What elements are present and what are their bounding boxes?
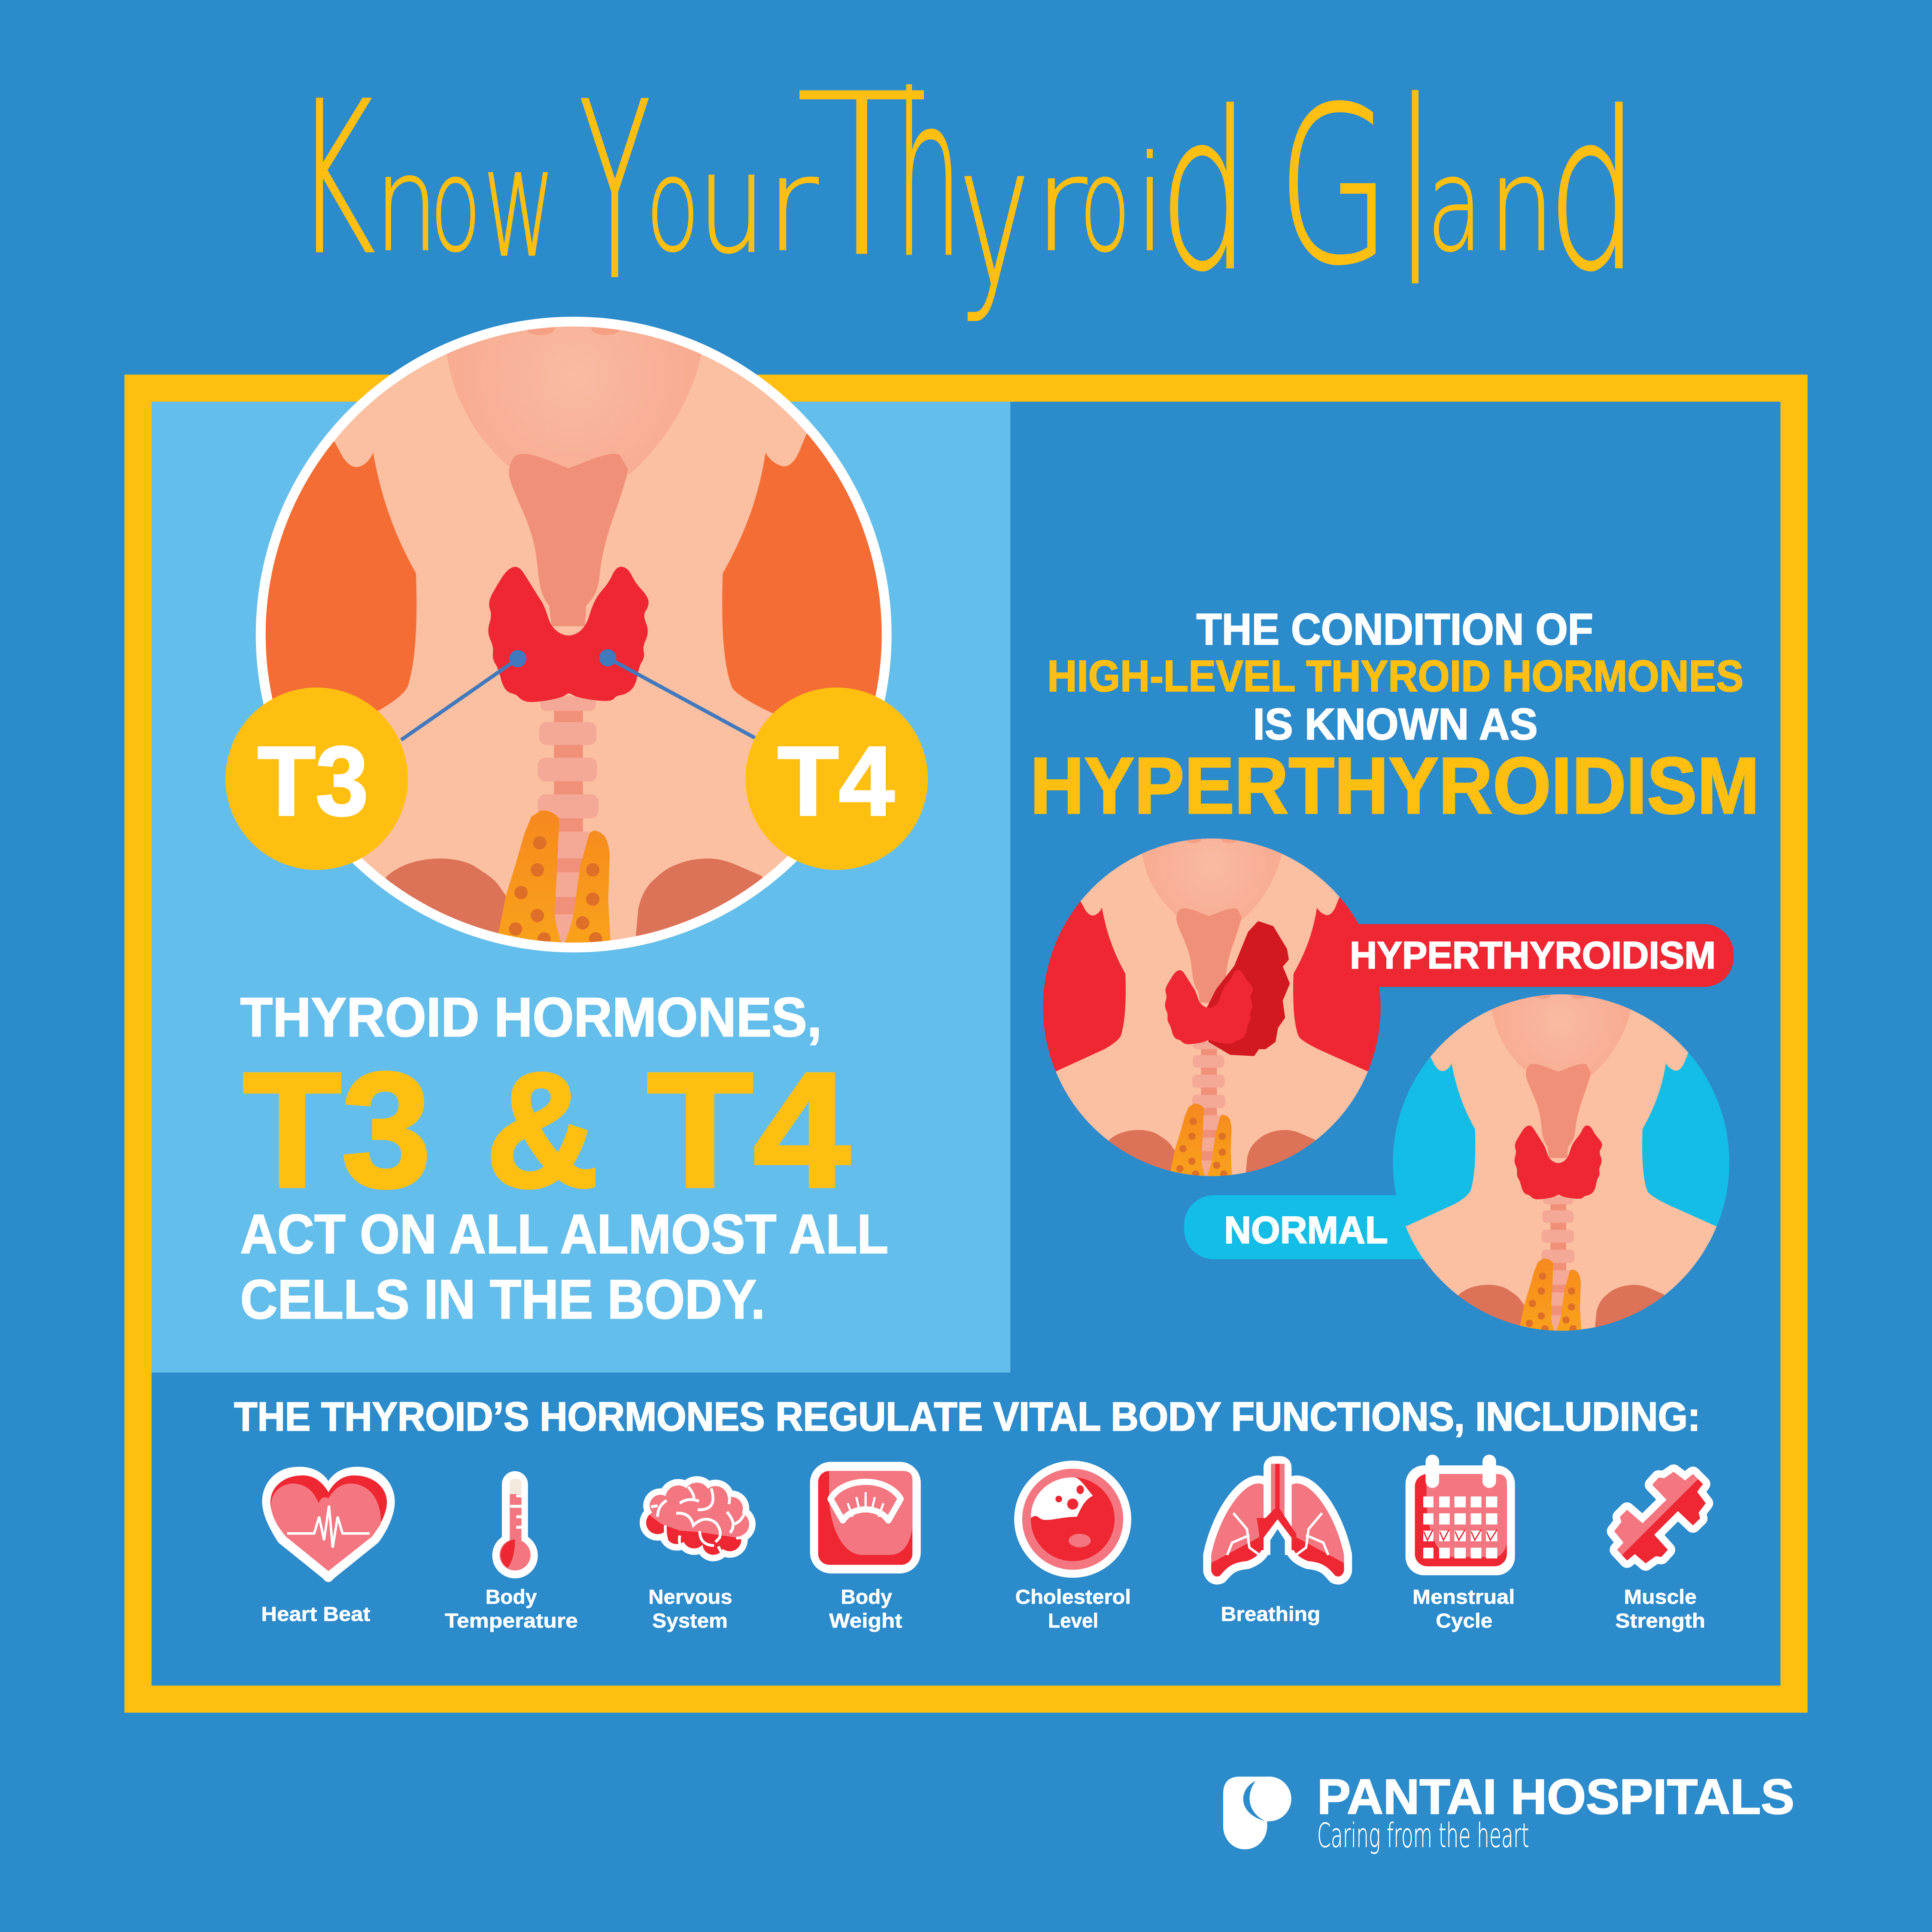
label: menstrual cycle: Cycle (1436, 1610, 1492, 1632)
title: i (1135, 128, 1166, 281)
label: heart beat: Heart Beat (261, 1603, 371, 1625)
label: body weight (829, 1586, 902, 1632)
text block: hyperthyroidism heading: THE CONDITION OF (1197, 604, 1593, 654)
label: cholesterol level: Level (1048, 1610, 1098, 1632)
title: r (1034, 130, 1088, 280)
title: n (374, 127, 439, 281)
label: body temperature: Temperature (445, 1610, 578, 1632)
text block: thyroid hormones: T3 (243, 1038, 431, 1221)
label pill: normal (1184, 1195, 1480, 1259)
label: body weight: Weight (829, 1610, 902, 1632)
icon: cholesterol vessel (1014, 1461, 1131, 1578)
logo text (1317, 1769, 1794, 1855)
label pill background: hyperthyroidism (1306, 924, 1734, 987)
badge: T3 (225, 687, 408, 870)
icon: lungs (1211, 1456, 1344, 1589)
label: nervous system: Nervous (648, 1586, 732, 1608)
text block: hyperthyroidism heading: HYPERTHYROIDISM (1030, 741, 1759, 830)
logo mark (1223, 1777, 1291, 1849)
text block: thyroid hormones: ACT ON ALL ALMOST ALL (240, 1203, 888, 1265)
icon: thermometer (492, 1471, 538, 1578)
illustration: neck with thyroid and T3 T4 (225, 314, 928, 957)
title: a (1427, 130, 1482, 280)
title: o (646, 130, 700, 280)
title (296, 46, 1638, 342)
badge: T4 (745, 687, 928, 870)
title: d (1548, 66, 1638, 319)
text block: hyperthyroidism heading: HIGH-LEVEL THYROID HORMONES (1047, 651, 1744, 701)
title: h (895, 48, 963, 306)
title: K (296, 57, 375, 301)
label: menstrual cycle (1413, 1586, 1515, 1632)
text block: hyperthyroidism heading: IS KNOWN AS (1253, 699, 1538, 749)
title: u (697, 122, 766, 284)
title: y (959, 103, 1030, 329)
badge: T3: T3 (258, 726, 368, 836)
label: nervous system: System (652, 1610, 728, 1632)
label: cholesterol level (1015, 1586, 1131, 1632)
title: G (1278, 61, 1391, 313)
title: o (430, 129, 481, 280)
title: w (483, 115, 556, 291)
title: Y (579, 51, 650, 334)
icon: calendar (1406, 1455, 1515, 1575)
badge: T4: T4 (778, 726, 895, 836)
label: muscle strength: Strength (1615, 1610, 1705, 1632)
illustration: hyperthyroid neck (1043, 838, 1381, 1176)
label pill: normal: NORMAL (1224, 1209, 1388, 1252)
label: muscle strength: Muscle (1624, 1586, 1697, 1608)
text block: thyroid hormones: CELLS IN THE BODY. (240, 1269, 765, 1331)
title: o (1079, 129, 1130, 280)
label: breathing: Breathing (1221, 1603, 1320, 1625)
label text: hyperthyroidism: HYPERTHYROIDISM (1350, 934, 1716, 977)
logo text: PANTAI HOSPITALS (1317, 1769, 1794, 1824)
icon: heart (262, 1467, 395, 1582)
icon: brain (646, 1482, 749, 1555)
label: menstrual cycle: Menstrual (1413, 1586, 1515, 1608)
text block: hyperthyroidism heading (1030, 604, 1759, 830)
text block: thyroid hormones (240, 987, 888, 1331)
text block: thyroid hormones: THYROID HORMONES, (240, 987, 822, 1048)
title: T (795, 46, 929, 307)
text block: thyroid hormones: T4 (647, 1038, 851, 1221)
label: body temperature: Body (486, 1586, 537, 1608)
label: nervous system (648, 1586, 732, 1632)
yellow frame (138, 388, 1794, 1699)
title: d (1160, 66, 1249, 319)
label: body weight: Body (841, 1586, 892, 1608)
panel: thyroid hormones (152, 402, 1010, 1373)
heading: vital body functions: THE THYROID’S HORMONES REGULATE VITAL BODY FUNCTIONS, INCLUDING: (234, 1394, 1700, 1440)
title: r (765, 130, 820, 280)
label: cholesterol level: Cholesterol (1015, 1586, 1131, 1608)
title: l (1398, 49, 1433, 342)
icon: weighing scale (810, 1462, 921, 1574)
label: body temperature (445, 1586, 578, 1632)
illustration: normal neck (1393, 994, 1729, 1331)
label: muscle strength (1615, 1586, 1705, 1632)
title: n (1488, 130, 1555, 280)
text block: thyroid hormones: & (486, 1038, 599, 1221)
logo text: Caring from the heart (1317, 1817, 1529, 1855)
icon: dumbbell (1614, 1472, 1706, 1563)
